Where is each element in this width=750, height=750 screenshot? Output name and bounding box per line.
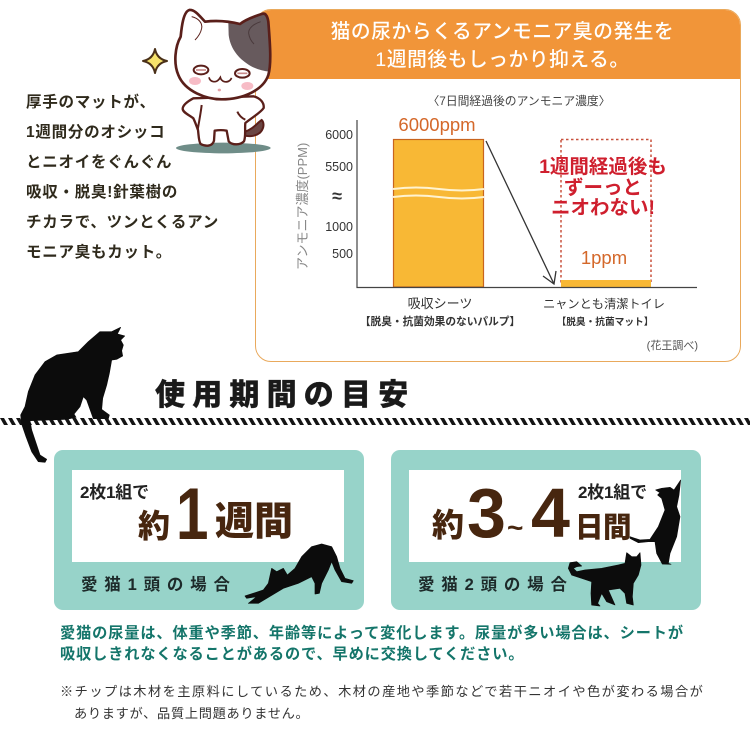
y axis labels: 6000 <box>325 128 353 142</box>
category label: cat toilet: ニャンとも清潔トイレ <box>543 297 665 311</box>
text block: urine note: 吸収しきれなくなることがあるので、早めに交換してください。 <box>60 646 524 663</box>
duration: about 3 to 4 days: 4 <box>531 474 570 552</box>
duration: about one week <box>138 474 293 555</box>
bar value: 6000ppm: 6000ppm <box>398 114 476 135</box>
white card <box>409 470 681 562</box>
duration: about one week: 約 <box>138 508 170 544</box>
note: two sheets per set: 2枚1組で <box>80 483 149 502</box>
duration: about 3 to 4 days: 約 <box>432 507 464 543</box>
axes <box>357 120 697 288</box>
text block: mat description <box>26 94 219 261</box>
panel: ammonia chart <box>255 9 741 362</box>
text block: mat description: 吸収・脱臭!針葉樹の <box>26 184 178 201</box>
duration: about 3 to 4 days: 日間 <box>575 512 631 544</box>
callout: no smell after one week: ずーっと <box>564 177 642 199</box>
category label: absorbent sheet: 吸収シーツ <box>408 296 472 311</box>
text block: wood chip footnote: ※チップは木材を主原料にしているため、木材の産地や季節などで若干ニオイや色が変わる場合が <box>60 684 704 699</box>
text block: urine note <box>60 624 684 663</box>
text block: urine note: 愛猫の尿量は、体重や季節、年齢等によって変化します。尿量が多い場合は、シートが <box>60 625 684 642</box>
white card <box>72 470 344 562</box>
target frame: 1ppm dotted <box>561 140 651 284</box>
bar value: 1ppm: 1ppm <box>581 247 627 268</box>
duration: about 3 to 4 days <box>432 474 631 552</box>
label: one cat case: 愛猫1頭の場合 <box>81 576 237 594</box>
panel heading: 猫の尿からくるアンモニア臭の発生を <box>331 21 674 43</box>
text block: mat description: 1週間分のオシッコ <box>26 124 165 141</box>
y axis labels: 500 <box>332 247 353 261</box>
bar: absorbent sheet 6000ppm <box>393 140 484 287</box>
duration: about 3 to 4 days: ~ <box>507 512 523 543</box>
source note: (花王調べ) <box>647 339 698 352</box>
duration: about one week: 週間 <box>215 501 293 544</box>
category label: absorbent sheet <box>360 296 520 328</box>
panel: two cats <box>391 450 701 610</box>
callout: no smell after one week: ニオわない! <box>551 197 655 219</box>
panel heading <box>254 8 744 79</box>
y axis labels <box>325 128 353 261</box>
panel: one cat <box>54 450 364 610</box>
callout: no smell after one week <box>539 156 667 219</box>
text block: wood chip footnote: ありますが、品質上問題ありません。 <box>74 706 309 721</box>
y axis title: アンモニア濃度(PPM) <box>295 143 310 270</box>
heading: usage period: 使用期間の目安 <box>155 379 415 412</box>
duration: about one week: 1 <box>176 474 208 555</box>
category label: absorbent sheet: 【脱臭・抗菌効果のないパルプ】 <box>360 315 520 328</box>
arrow: decrease <box>486 141 556 284</box>
chart title: 〈7日間経過後のアンモニア濃度〉 <box>427 94 611 108</box>
category label: cat toilet: 【脱臭・抗菌マット】 <box>557 315 653 328</box>
text block: wood chip footnote <box>60 684 704 721</box>
text block: mat description: 厚手のマットが、 <box>26 94 156 111</box>
duration: about 3 to 4 days: 3 <box>467 474 506 552</box>
y axis labels: 5500 <box>325 160 353 174</box>
y axis labels: ≈ <box>332 186 342 206</box>
text block: mat description: モニア臭もカット。 <box>26 244 172 261</box>
note: two sheets per set: 2枚1組で <box>578 483 647 502</box>
callout: no smell after one week: 1週間経過後も <box>539 156 667 178</box>
y axis labels: 1000 <box>325 220 353 234</box>
category label: cat toilet <box>543 297 665 328</box>
text block: mat description: とニオイをぐんぐん <box>26 154 172 171</box>
panel heading: 1週間後もしっかり抑える。 <box>375 49 630 71</box>
text block: mat description: チカラで、ツンとくるアン <box>26 214 219 231</box>
bar: cat toilet 1ppm <box>561 280 651 287</box>
label: two cats case: 愛猫2頭の場合 <box>418 576 574 594</box>
